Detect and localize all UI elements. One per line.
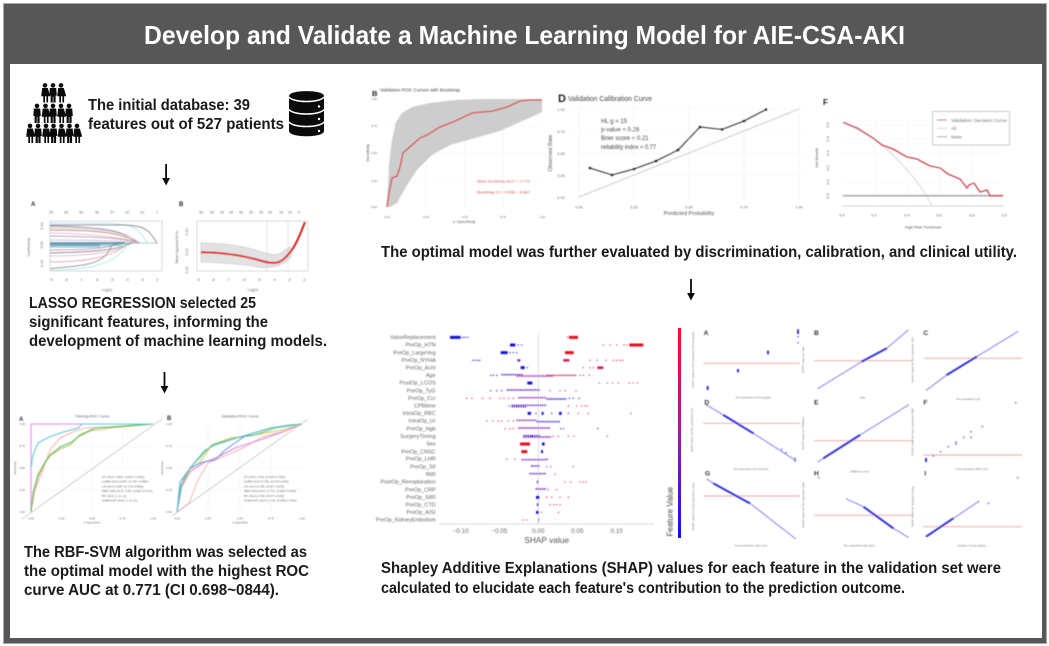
SHAP caption <box>381 560 1001 597</box>
chart: validation calibration curve: 0.25 <box>557 174 565 178</box>
chart: training ROC curve: LGBM (AUC:0.847, (0.797~0.896)) <box>102 480 148 484</box>
chart: validation calibration curve: 0.75 <box>740 206 748 210</box>
chart: LASSO coefficient paths: 39 <box>79 210 83 214</box>
chart: decision curve: Net Benefit <box>814 147 819 168</box>
chart: validation calibration curve: p-value = 0.28 <box>601 128 640 134</box>
chart: validation ROC curve: 1.00 <box>299 516 305 520</box>
chart: bootstrap validation ROC: 0.00 <box>384 215 390 219</box>
chart: LASSO coefficient paths: 1 <box>156 210 158 214</box>
chart: LASSO cross-validation: -9 <box>196 278 200 282</box>
chart: validation calibration curve: 0.00 <box>557 196 565 200</box>
chart: training ROC curve <box>13 414 162 524</box>
chart: bootstrap validation ROC: 0.50 <box>462 215 468 219</box>
chart: LASSO coefficient paths: 13 <box>140 210 144 214</box>
chart: training ROC curve: RBF-SVM (AUC: 0.95, (0.926~0.974)) <box>102 489 153 493</box>
chart: bootstrap validation ROC: 0.00 <box>371 205 377 209</box>
chart: validation ROC curve: RBF-SVM (AUC: 0.771, (0.698~0.844)) <box>244 489 296 493</box>
chart: validation calibration curve: Brier score = 0.21 <box>601 136 649 142</box>
feature labels: PreOp_SIRI <box>406 495 436 501</box>
chart: training ROC curve: Sensitivity <box>13 461 17 475</box>
chart: bootstrap validation ROC: 1−Specificity <box>453 219 475 224</box>
chart: validation ROC curve: LGBM (AUC:0.759, (0.679~0.83)) <box>244 480 289 484</box>
lasso caption <box>29 295 327 350</box>
chart: LASSO cross-validation: 32 <box>249 210 253 214</box>
RBF-SVM caption: The RBF-SVM algorithm was selected as <box>24 544 307 561</box>
feature labels: PreOp_Hgb <box>407 426 436 432</box>
chart: LASSO coefficient paths: A <box>31 202 36 208</box>
chart: LASSO coefficient paths: -4 <box>125 278 129 282</box>
tiny axis titles: SHAP value for Pre-operative TyG <box>910 337 914 383</box>
tiny axis titles: SHAP value for Pre-operative Hgb <box>801 482 805 528</box>
lasso caption: significant features, informing the <box>29 314 268 331</box>
chart: validation ROC curve: 0.50 <box>166 466 172 470</box>
feature labels: PreOp_AISI <box>406 510 436 516</box>
chart: validation calibration curve: D <box>558 93 566 105</box>
feature labels: ValveReplacement <box>390 335 436 341</box>
tiny axis titles: Intra-operative RBC (ml) <box>955 467 988 471</box>
title: Develop and Validate a Machine Learning Model for AIE-CSA-AKI <box>144 20 905 50</box>
feature labels: PreOp_LargeVeg <box>393 350 436 356</box>
chart: LASSO coefficient paths: Coefficients <box>27 237 31 256</box>
chart: training ROC curve: XGBOOST (AUC:1, (1~1)) <box>102 498 137 502</box>
chart: bootstrap validation ROC: B <box>372 89 378 98</box>
chart: training ROC curve: 1-Specificity <box>84 520 101 524</box>
SHAP caption: calculated to elucidate each feature's contribution to the prediction outcome. <box>381 580 905 597</box>
chart: LASSO cross-validation: B <box>179 202 184 208</box>
chart: decision curve: High Risk Threshold <box>905 224 941 230</box>
chart: validation ROC curve: Validation ROC Curve <box>221 414 259 418</box>
chart: validation calibration curve <box>548 93 805 217</box>
panel letters: F <box>923 400 927 407</box>
tiny axis titles: Pre-operative Hgb (g/L) <box>844 544 875 548</box>
chart: training ROC curve: RF (AUC:1, (1~1)) <box>102 494 126 498</box>
zero reference lines <box>703 358 1022 527</box>
feature labels: BMI <box>426 472 436 478</box>
chart: bootstrap validation ROC: Mean Bootstrap AUC = 0.772 <box>477 178 531 184</box>
chart: decision curve: 0.1 <box>825 178 830 185</box>
tiny axis titles: Pre-operative Ccr (ml/min) <box>733 467 768 471</box>
chart: decision curve: Validation Decision Curve <box>951 118 1007 123</box>
chart: LASSO cross-validation: -7 <box>226 278 230 282</box>
chart: LASSO coefficient paths: -9 <box>49 278 53 282</box>
chart: LASSO coefficient paths: 23 <box>125 210 129 214</box>
chart: SHAP beeswarm: Feature Value <box>666 486 675 536</box>
chart: validation ROC curve: 0.75 <box>268 516 274 520</box>
chart: decision curve: 0.2 <box>871 212 878 218</box>
lasso caption: development of machine learning models. <box>29 333 327 350</box>
feature labels: PostOp_LCOS <box>399 381 436 387</box>
chart: training ROC curve: 0.25 <box>59 516 65 520</box>
tiny axis titles: SHAP value for Pre-operative NYHA grade <box>691 331 695 388</box>
feature labels: Age <box>426 373 436 379</box>
feature labels: SurgeryTiming <box>400 434 436 440</box>
chart: LASSO cross-validation: 18 <box>279 210 283 214</box>
dependence lines <box>707 330 1018 538</box>
chart: decision curve: 1.0 <box>1001 212 1008 218</box>
chart: validation calibration curve: Observed Rate <box>548 134 554 172</box>
axis labels <box>453 528 623 535</box>
tiny axis titles: SHAP value for Intra-operative urine <box>691 482 695 531</box>
chart: validation calibration curve: 0.25 <box>630 206 638 210</box>
chart: LASSO coefficient paths: -2 <box>155 278 159 282</box>
SHAP caption: Shapley Additive Explanations (SHAP) values for each feature in the validation set were <box>381 560 1001 577</box>
initial database text: features out of 527 patients <box>88 116 284 133</box>
axis labels: 0.00 <box>532 528 545 535</box>
chart: LASSO coefficient paths: -6 <box>95 278 99 282</box>
panel letters <box>704 330 928 478</box>
chart: training ROC curve: 0.25 <box>19 488 25 492</box>
arrow <box>162 164 170 186</box>
chart: validation ROC curve: 0.25 <box>205 516 211 520</box>
chart: decision curve: 0.4 <box>904 212 911 218</box>
chart: validation calibration curve: Predicted Probability <box>664 211 714 217</box>
chart: decision curve <box>814 98 1010 230</box>
chart: decision curve: 0.5 <box>825 121 830 128</box>
chart: decision curve: 0.0 <box>825 192 830 199</box>
chart: LASSO cross-validation: 39 <box>220 210 224 214</box>
chart: training ROC curve: 0.00 <box>28 516 34 520</box>
chart: validation calibration curve: 1.00 <box>557 108 565 112</box>
tiny axis titles: SHAP value for Intra-operative RBC <box>910 407 914 455</box>
chart: bootstrap validation ROC: 0.25 <box>371 179 377 183</box>
chart: training ROC curve: 0.75 <box>19 444 25 448</box>
axis labels: 0.10 <box>610 528 623 535</box>
feature labels: PreOp_CNSC <box>401 449 436 455</box>
chart: training ROC curve: 1.00 <box>19 422 25 426</box>
chart: decision curve: 0.0 <box>839 212 846 218</box>
chart: validation ROC curve: 0.75 <box>166 444 172 448</box>
chart: LASSO cross-validation: 10 <box>288 210 292 214</box>
chart: bootstrap validation ROC: 0.50 <box>371 151 377 155</box>
chart: LASSO coefficient paths: 39 <box>49 210 53 214</box>
chart: validation ROC curve: RF (AUC:0.759, (0.677~0.84)) <box>244 494 284 498</box>
feature labels: PreOp_LHR <box>406 457 436 463</box>
feature labels: PreOp_CTD <box>405 502 436 508</box>
fuzzy bands <box>502 375 577 489</box>
chart: SHAP beeswarm: SHAP value <box>524 535 569 545</box>
feature labels: PreOp_HTN <box>405 343 436 349</box>
chart: LASSO cross-validation: -4 <box>272 278 276 282</box>
chart: LASSO coefficient paths: -8 <box>64 278 68 282</box>
axis labels: −0.10 <box>453 528 469 535</box>
chart: LASSO cross-validation: Mean-Squared Error <box>175 230 179 263</box>
lasso caption: LASSO REGRESSION selected 25 <box>29 295 256 312</box>
icon: patient crowd <box>26 83 82 143</box>
chart: training ROC curve: 0.50 <box>19 466 25 470</box>
panel letters: A <box>704 330 709 337</box>
axis labels: 0.05 <box>571 528 584 535</box>
chart: decision curve: 0.6 <box>936 212 943 218</box>
colour bar <box>678 328 681 538</box>
chart: LASSO coefficient paths: -0.10 <box>40 260 44 268</box>
feature labels: IntraOp_Ur <box>409 419 436 425</box>
chart: LASSO cross-validation: -8 <box>211 278 215 282</box>
chart: LASSO cross-validation: 0.24 <box>185 228 189 236</box>
chart: validation ROC curve: 1.00 <box>166 422 172 426</box>
feature labels: PreOp_KidneyEmbolism <box>376 518 436 524</box>
chart: bootstrap validation ROC: 0.75 <box>500 215 506 219</box>
chart: decision curve: 0.4 <box>825 135 830 142</box>
chart: decision curve: 0.8 <box>969 212 976 218</box>
chart: LASSO coefficient paths: -5 <box>110 278 114 282</box>
chart: bootstrap validation ROC: Bootstrap CI = 0.696 ~ 0.847 <box>477 190 531 194</box>
evaluation caption: The optimal model was further evaluated by discrimination, calibration, and clinical utility. <box>381 244 1017 261</box>
chart: LASSO coefficient paths: 0.00 <box>40 242 44 248</box>
chart: LASSO coefficient paths: 36 <box>95 210 99 214</box>
tiny axis titles: Pre-operative TyG <box>956 397 981 401</box>
chart: validation calibration curve: 0.00 <box>575 206 583 210</box>
chart: validation calibration curve: 0.75 <box>557 130 565 134</box>
chart: validation ROC curve: 0.50 <box>237 516 243 520</box>
tiny axis titles: Pre-operative NYHA grade <box>736 395 771 399</box>
chart: LASSO coefficient paths: 0.10 <box>40 222 44 230</box>
feature labels: PreOp_SII <box>410 464 436 470</box>
chart: validation ROC curve: Sensitivity <box>160 461 164 475</box>
chart: validation ROC curve: 1-Specificity <box>232 520 249 524</box>
chart: LASSO cross-validation: 38 <box>229 210 233 214</box>
chart: LASSO cross-validation: -2 <box>302 278 306 282</box>
chart: LASSO cross-validation: 26 <box>259 210 263 214</box>
chart: LASSO cross-validation: 6 <box>298 210 300 214</box>
chart: training ROC curve: 0.00 <box>19 510 25 514</box>
chart: LASSO coefficient paths: -3 <box>140 278 144 282</box>
panel letters: E <box>814 400 819 407</box>
feature labels: IntraOp_RBC <box>403 411 436 417</box>
chart: validation ROC curve: DT (AUC: 0.60, (0.520~0.750)) <box>244 475 285 479</box>
chart: bootstrap validation ROC: 0.25 <box>423 215 429 219</box>
tiny axis titles: CPBtime (min) <box>850 469 869 473</box>
chart: training ROC curve: A <box>19 417 24 423</box>
chart: bootstrap validation ROC <box>365 88 545 224</box>
chart: validation calibration curve: HL g = 15 <box>601 119 628 125</box>
initial database text: The initial database: 39 <box>88 97 250 114</box>
tiny axis titles: Age <box>860 395 866 399</box>
tiny axis titles: SHAP value for Surgery timing <box>910 486 914 527</box>
initial database text <box>88 97 284 133</box>
feature labels: PreOp_NYHA <box>402 358 436 364</box>
chart: LASSO coefficient paths <box>27 202 162 292</box>
feature labels: PreOp_CRP <box>405 487 436 493</box>
feature labels: PostOp_Reexploration <box>380 480 436 486</box>
icon: database <box>289 91 324 136</box>
chart: validation calibration curve: 1.00 <box>795 206 803 210</box>
chart: decision curve: None <box>951 134 962 140</box>
chart: validation calibration curve: 0.50 <box>685 206 693 210</box>
chart: SHAP beeswarm <box>376 333 675 545</box>
feature labels <box>376 335 436 524</box>
feature labels: PreOp_Ccr <box>408 396 436 402</box>
dense point clusters <box>450 337 643 520</box>
panel letters: H <box>814 471 819 478</box>
panel letters: G <box>705 471 710 478</box>
chart: validation ROC curve: 0.00 <box>174 516 180 520</box>
chart: training ROC curve: 1.00 <box>150 516 156 520</box>
chart: LASSO cross-validation: 25 <box>268 210 272 214</box>
chart: LASSO cross-validation: -5 <box>257 278 261 282</box>
tiny axis titles: Intra-operative urine (ml) <box>735 544 767 548</box>
panel letters: B <box>814 330 819 337</box>
chart: bootstrap validation ROC: 0.75 <box>371 124 377 128</box>
feature labels: PreOp_AchI <box>406 365 436 371</box>
chart: LASSO coefficient paths: 39 <box>64 210 68 214</box>
chart: decision curve: 0.2 <box>825 164 830 171</box>
chart: LASSO cross-validation: -3 <box>287 278 291 282</box>
chart: LASSO coefficient paths: 27 <box>110 210 114 214</box>
chart: validation ROC curve <box>160 414 308 524</box>
tiny axis titles: SHAP value for CPBtime <box>801 417 805 450</box>
arrow <box>687 279 695 300</box>
panel letters: C <box>923 330 928 337</box>
chart: training ROC curve: 0.50 <box>89 516 95 520</box>
chart: LASSO cross-validation: Log(λ) <box>248 288 258 292</box>
chart: LASSO coefficient paths: Log(λ) <box>102 288 112 292</box>
RBF-SVM caption <box>24 544 309 599</box>
feature labels: PreOp_TyG <box>407 388 436 394</box>
chart: bootstrap validation ROC: Validation ROC Curves with Bootstrap <box>380 88 460 94</box>
chart: LASSO cross-validation: 0.20 <box>185 266 189 274</box>
RBF-SVM caption: curve AUC at 0.771 (CI 0.698~0844). <box>24 582 279 599</box>
chart: bootstrap validation ROC: Sensitivity <box>365 144 370 162</box>
panel letters: D <box>704 400 709 407</box>
feature labels: CPBtime <box>414 404 436 410</box>
chart: decision curve: 0.3 <box>825 149 830 156</box>
sparse points <box>463 337 598 459</box>
tiny axis titles: SHAP value for Pre-operative Ccr <box>690 408 694 452</box>
chart: bootstrap validation ROC: 1.00 <box>539 215 545 219</box>
chart: validation ROC curve: 0.25 <box>166 488 172 492</box>
chart: training ROC curve: LR (AUC:0.829, (0.776~0.881)) <box>102 484 144 488</box>
chart: validation calibration curve: 0.50 <box>557 152 565 156</box>
tiny axis titles: Surgery timing (days) <box>957 544 986 548</box>
chart: LASSO cross-validation: 39 <box>199 210 203 214</box>
chart: LASSO coefficient paths: -7 <box>79 278 83 282</box>
chart: decision curve: All <box>951 126 956 131</box>
chart: LASSO cross-validation: 36 <box>239 210 243 214</box>
chart: validation ROC curve: B <box>167 416 172 422</box>
chart: validation ROC curve: 0.00 <box>166 510 172 514</box>
chart: validation ROC curve: XGBOOST (AUC:0.716, (0.638~0.794)) <box>244 498 297 502</box>
chart: SHAP dependence grid <box>690 329 1022 548</box>
chart: validation ROC curve: LR (AUC:0.749, (0.667~0.83)) <box>244 484 284 488</box>
chart: training ROC curve: 0.75 <box>120 516 126 520</box>
axis labels: −0.05 <box>491 528 508 535</box>
panel letters: I <box>924 471 926 478</box>
chart: LASSO cross-validation <box>175 202 308 292</box>
feature labels: Sex <box>426 442 436 448</box>
chart: LASSO cross-validation: 39 <box>210 210 214 214</box>
RBF-SVM caption: the optimal model with the highest ROC <box>24 563 309 580</box>
chart: LASSO cross-validation: 0.22 <box>185 248 189 256</box>
chart: validation calibration curve: Validation Calibration Curve <box>568 96 652 103</box>
arrow <box>161 372 168 394</box>
chart: training ROC curve: DT (AUC: 0.863, (0.817~0.901)) <box>102 475 145 479</box>
chart: LASSO cross-validation: -6 <box>242 278 246 282</box>
chart: validation calibration curve: reliability index = 0.77 <box>601 145 657 151</box>
tiny axis titles <box>690 331 988 548</box>
chart: decision curve: F <box>823 98 828 107</box>
chart: training ROC curve: Training ROC Curve <box>75 414 109 418</box>
tiny axis titles: SHAP value for Age <box>801 347 805 373</box>
chart: bootstrap validation ROC: 1.00 <box>371 97 377 101</box>
